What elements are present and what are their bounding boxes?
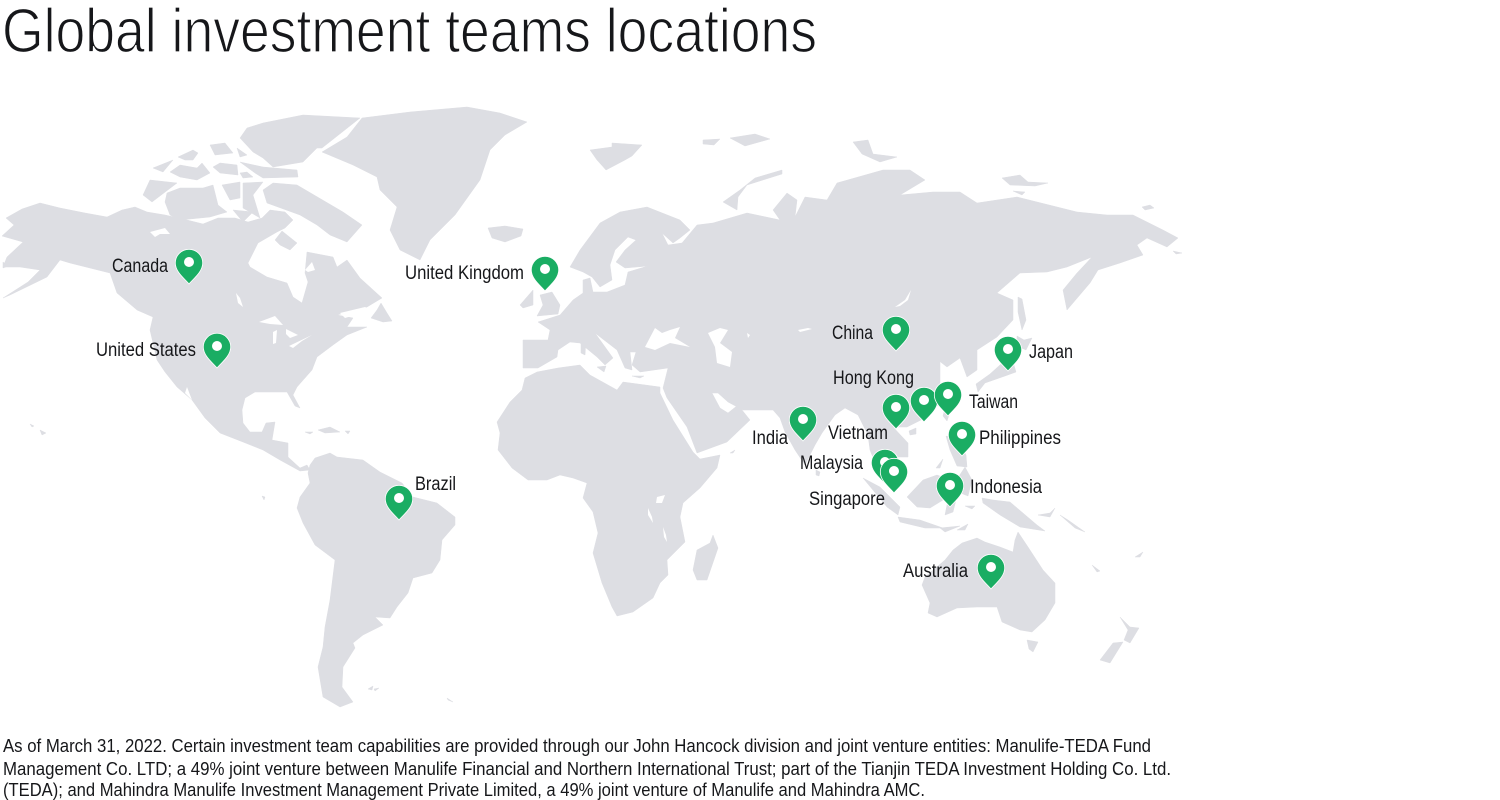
water: North American lakes xyxy=(150,228,372,400)
map: Greenland xyxy=(322,107,527,260)
pin: Singapore: Singapore xyxy=(809,489,885,510)
footnote: (TEDA); and Mahindra Manulife Investment Management Private Limited, a 49% joint venture of Manulife and Mahindra AMC. xyxy=(3,780,925,800)
pin: United States: United States xyxy=(96,340,196,361)
pin: Canada xyxy=(112,249,203,284)
pin: Hong Kong xyxy=(833,368,938,422)
footnote: As of March 31, 2022. Certain investment team capabilities are provided through our John Hancock division and joint venture entities: Manulife-TEDA Fund xyxy=(3,736,1151,756)
pin: Hong Kong: Hong Kong xyxy=(833,368,914,389)
footnote: Management Co. LTD; a 49% joint venture between Manulife Financial and Northern International Trust; part of the Tianjin TEDA Investment Holding Co. Ltd. xyxy=(3,759,1171,779)
world map xyxy=(2,107,1182,707)
footnote xyxy=(3,736,1171,800)
pin: Malaysia xyxy=(800,449,899,484)
map: East Asian islands xyxy=(909,297,1032,468)
water: Lake Baikal xyxy=(895,290,911,307)
pin: Brazil: Brazil xyxy=(415,474,456,495)
pin: Canada: Canada xyxy=(112,256,168,277)
inland waters xyxy=(150,228,911,542)
pin: Brazil xyxy=(385,474,456,520)
pin: Taiwan: Taiwan xyxy=(969,392,1018,413)
pin: Malaysia: Malaysia xyxy=(800,453,863,474)
pin: China xyxy=(832,316,910,351)
pin: Philippines xyxy=(948,421,1061,456)
pin: Australia: Australia xyxy=(903,561,968,582)
water: Black Sea xyxy=(645,327,690,350)
pin: India xyxy=(752,406,817,449)
pin: United Kingdom: United Kingdom xyxy=(405,263,524,284)
map: Southeast Asian islands xyxy=(863,467,1085,532)
map: South America xyxy=(297,453,455,707)
map: Newfoundland xyxy=(371,303,392,322)
water: African lakes xyxy=(648,495,667,542)
map: North America xyxy=(2,203,382,471)
pin: Indonesia xyxy=(936,472,1042,507)
map: Pacific islands xyxy=(1027,552,1143,663)
pin: Singapore xyxy=(809,458,908,510)
pin: United States xyxy=(96,333,231,368)
pin: India: India xyxy=(752,428,788,449)
map: Arctic islands xyxy=(143,115,362,250)
pin: United Kingdom xyxy=(405,256,559,291)
water: Central Asian lakes xyxy=(747,328,812,338)
water: Caspian Sea xyxy=(708,328,732,367)
pin: China: China xyxy=(832,323,873,344)
pin: Japan: Japan xyxy=(1029,342,1073,363)
map: Eurasia xyxy=(523,170,1178,490)
pin: Japan xyxy=(994,336,1073,371)
pin: Vietnam: Vietnam xyxy=(828,423,888,444)
map: Madagascar and small Atlantic islands xyxy=(3,262,820,702)
pin: Philippines: Philippines xyxy=(979,428,1061,449)
map: Australia xyxy=(922,532,1055,632)
map: European and Arctic islands xyxy=(488,134,1182,378)
pin: Taiwan xyxy=(934,381,1018,416)
pin: Indonesia: Indonesia xyxy=(970,477,1042,498)
pin: Australia xyxy=(903,554,1005,589)
map: Africa xyxy=(497,365,720,616)
pin: Vietnam xyxy=(828,394,910,444)
